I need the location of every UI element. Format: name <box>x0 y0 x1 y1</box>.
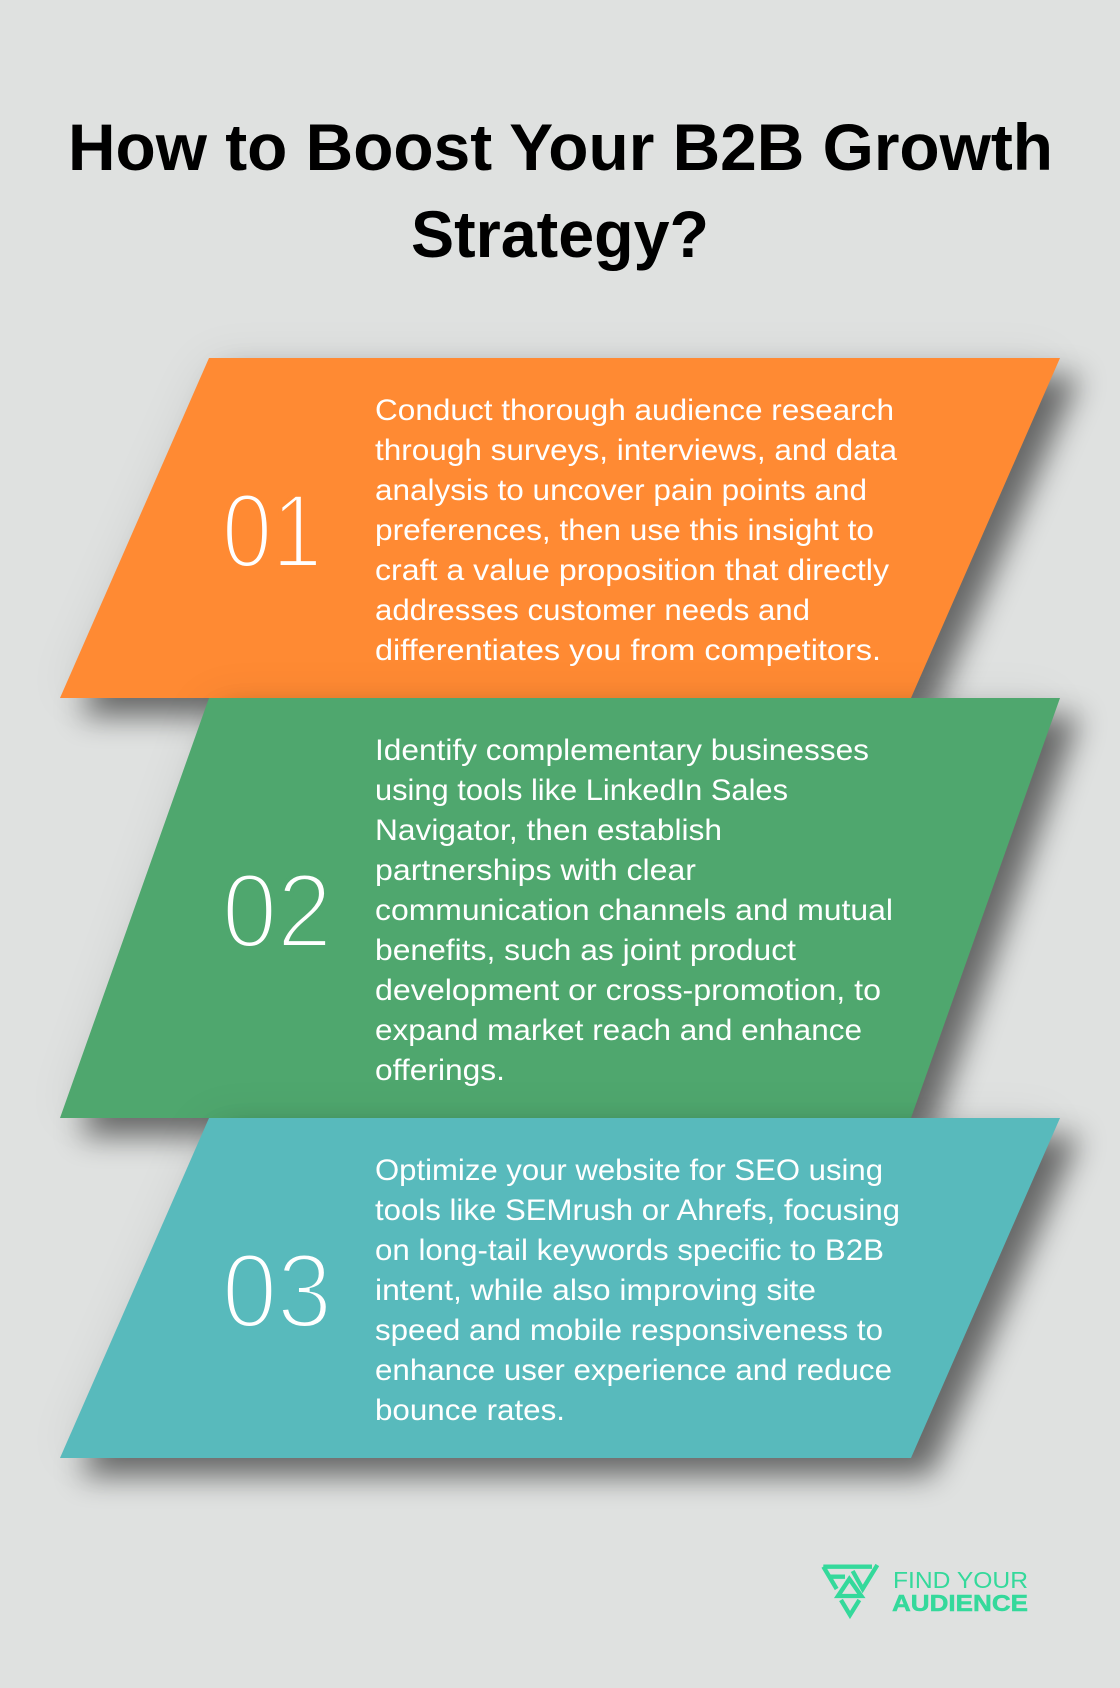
text: step 02 description: Navigator, then establish <box>375 814 722 847</box>
panel: step 03 <box>60 1118 1080 1476</box>
text: step 02 description: Identify complementary businesses <box>375 734 869 767</box>
text: step 02 description: expand market reach and enhance <box>375 1014 862 1047</box>
text: step 01 description: analysis to uncover pain points and <box>375 474 867 507</box>
panel: step 01 <box>60 358 1080 716</box>
logo wordmark: AUDIENCE <box>892 1590 1028 1616</box>
logo: Find Your Audience <box>823 1565 1028 1616</box>
text: step 01 description: craft a value proposition that directly <box>375 554 889 587</box>
logo wordmark <box>892 1567 1028 1616</box>
logo wordmark: FIND YOUR <box>893 1567 1028 1593</box>
text: step 02 description <box>375 734 893 1087</box>
text: step 02 description: partnerships with clear <box>375 854 696 887</box>
title <box>68 110 1053 271</box>
text: step 01 description: preferences, then use this insight to <box>375 514 874 547</box>
text: step 01 description: addresses customer needs and <box>375 594 810 627</box>
text: step 03 description: on long-tail keywords specific to B2B <box>375 1234 884 1267</box>
title: Strategy? <box>411 197 709 271</box>
number 01: 01 <box>222 473 322 590</box>
title: How to Boost Your B2B Growth <box>68 110 1053 184</box>
text: step 03 description: enhance user experience and reduce <box>375 1354 892 1387</box>
number 02: 02 <box>222 853 332 970</box>
text: step 03 description: bounce rates. <box>375 1394 565 1427</box>
text: step 03 description: intent, while also improving site <box>375 1274 816 1307</box>
text: step 02 description: benefits, such as joint product <box>375 934 797 967</box>
text: step 01 description: through surveys, interviews, and data <box>375 434 897 467</box>
icon: triangle mark <box>823 1565 877 1615</box>
text: step 02 description: communication channels and mutual <box>375 894 893 927</box>
text: step 01 description: differentiates you from competitors. <box>375 634 881 667</box>
text: step 02 description: offerings. <box>375 1054 505 1087</box>
text: step 01 description: Conduct thorough audience research <box>375 394 894 427</box>
text: step 03 description: speed and mobile responsiveness to <box>375 1314 883 1347</box>
text: step 02 description: using tools like LinkedIn Sales <box>375 774 788 807</box>
text: step 03 description: Optimize your website for SEO using <box>375 1154 883 1187</box>
text: step 02 description: development or cross-promotion, to <box>375 974 881 1007</box>
number 03: 03 <box>222 1233 332 1350</box>
text: step 03 description: tools like SEMrush or Ahrefs, focusing <box>375 1194 900 1227</box>
panel: step 02 <box>60 698 1080 1136</box>
text: step 01 description <box>375 394 897 667</box>
text: step 03 description <box>375 1154 900 1427</box>
